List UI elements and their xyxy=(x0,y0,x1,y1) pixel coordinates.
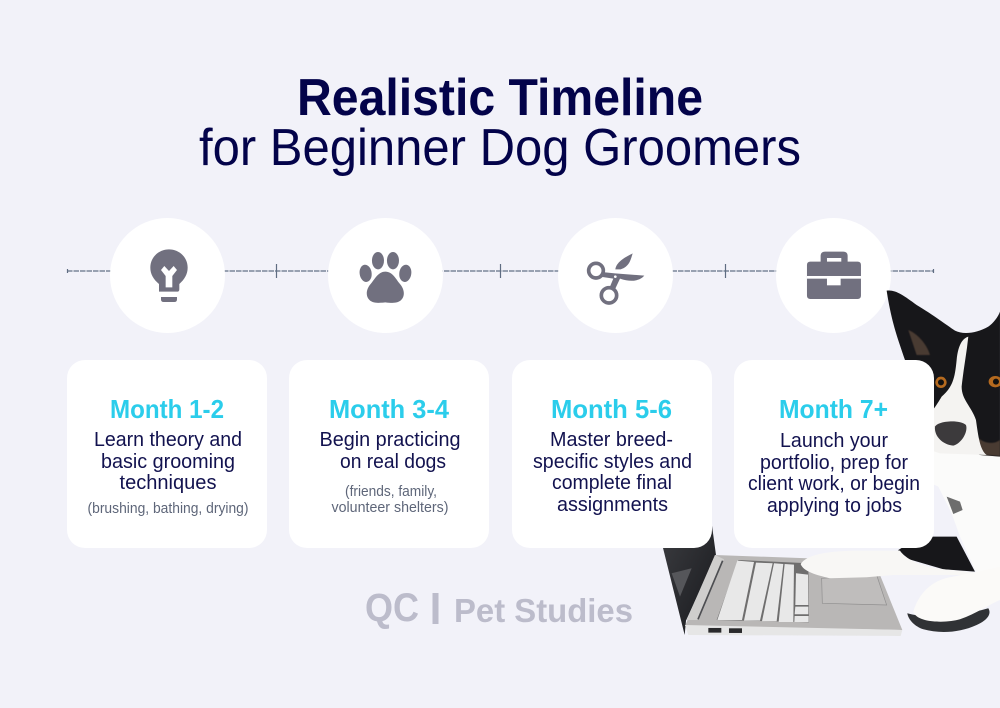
step 3 icon: scissors xyxy=(558,218,673,333)
dog body white xyxy=(917,443,1000,580)
card 3: Month 5-6 xyxy=(512,360,712,548)
title xyxy=(199,69,801,177)
logo: QC Pet Studies xyxy=(365,586,633,630)
logo: QC Pet Studies: Pet Studies xyxy=(454,592,633,629)
card 4: Month 7+: applying to jobs xyxy=(767,495,902,517)
brown cheek xyxy=(977,437,1000,456)
card 4: Month 7+: portfolio, prep for xyxy=(760,452,908,474)
card 1: Month 1-2: Month 1-2 xyxy=(110,394,224,424)
card 2: Month 3-4: Month 3-4 xyxy=(329,394,450,424)
card 2: Month 3-4 xyxy=(289,360,489,548)
front paw on laptop xyxy=(801,551,977,578)
step 1 icon: light bulb xyxy=(110,218,225,333)
white blaze and muzzle xyxy=(920,337,987,455)
card 1: Month 1-2: basic grooming xyxy=(101,451,235,473)
card 2: Month 3-4: (friends, family, xyxy=(345,484,437,500)
laptop xyxy=(663,523,902,636)
step 2 icon: paw print xyxy=(328,218,443,333)
card 3: Month 5-6: specific styles and xyxy=(533,451,692,473)
left eye xyxy=(935,377,947,388)
title: Realistic Timeline xyxy=(297,69,703,127)
card 4: Month 7+: client work, or begin xyxy=(748,473,920,495)
nose xyxy=(935,421,966,446)
card 3: Month 5-6: assignments xyxy=(557,494,668,516)
step 4 icon: briefcase xyxy=(776,218,891,333)
card 1: Month 1-2 xyxy=(67,360,267,548)
title: for Beginner Dog Groomers xyxy=(199,119,801,177)
card 2: Month 3-4: Begin practicing xyxy=(320,429,460,451)
card 3: Month 5-6: complete final xyxy=(552,472,672,494)
card 4: Month 7+: Month 7+ xyxy=(779,394,888,424)
dog head black xyxy=(887,290,1000,457)
front leg black patch xyxy=(898,537,975,572)
card 1: Month 1-2: techniques xyxy=(120,472,216,494)
ear inner xyxy=(908,330,930,355)
dog and laptop photo xyxy=(663,290,1000,636)
logo: QC Pet Studies: QC xyxy=(365,586,419,630)
right eye xyxy=(989,376,1000,387)
card 2: Month 3-4: on real dogs xyxy=(340,451,446,473)
card 1: Month 1-2: Learn theory and xyxy=(94,429,242,451)
dog collar shadow xyxy=(947,497,963,514)
card 1: Month 1-2: (brushing, bathing, drying) xyxy=(88,501,248,517)
card 4: Month 7+: Launch your xyxy=(780,430,888,452)
card 4: Month 7+ xyxy=(734,360,934,548)
mouse xyxy=(907,608,990,632)
second paw xyxy=(913,567,1000,622)
timeline line xyxy=(67,264,934,278)
card 2: Month 3-4: volunteer shelters) xyxy=(332,500,448,516)
card 3: Month 5-6: Master breed- xyxy=(550,429,673,451)
card 3: Month 5-6: Month 5-6 xyxy=(551,394,672,424)
